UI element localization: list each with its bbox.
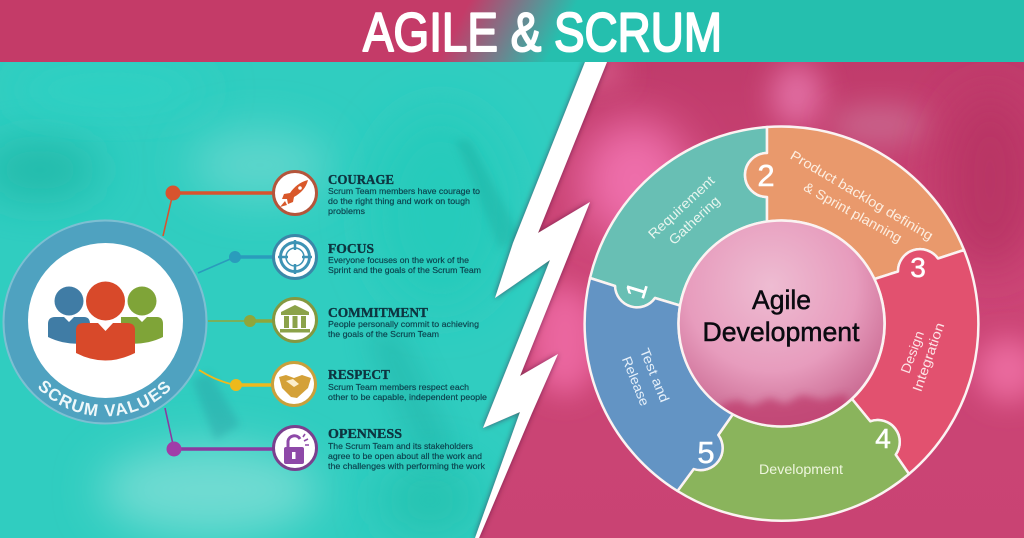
heading and description	[328, 242, 481, 275]
heading and description	[328, 368, 487, 402]
hub label: Agile	[752, 285, 811, 315]
heading and description	[328, 173, 480, 216]
heading and description: COMMITMENT	[328, 306, 429, 321]
step numbers: 1	[619, 278, 654, 302]
segment 1: requirement gathering	[590, 127, 767, 307]
value: openness	[274, 426, 486, 471]
segment labels: Product backlog defining	[788, 148, 936, 243]
segment 4: development	[678, 399, 909, 521]
icon: rocket	[274, 172, 316, 214]
heading and description: FOCUS	[328, 242, 374, 257]
icon: target	[274, 236, 316, 278]
heading and description: The Scrum Team and its stakeholders	[328, 441, 473, 451]
heading and description: the goals of the Scrum Team	[328, 329, 439, 339]
panel: agile development cycle	[585, 126, 978, 521]
step numbers	[619, 158, 926, 470]
step numbers: 3	[910, 252, 926, 283]
connector: respect	[199, 370, 275, 391]
step numbers: 2	[757, 158, 775, 193]
badge: scrum values	[2, 220, 208, 424]
heading and description: People personally commit to achieving	[328, 319, 479, 329]
heading and description: Everyone focuses on the work of the	[328, 255, 469, 265]
connector: openness	[165, 408, 275, 456]
heading and description: agree to be open about all the work and	[328, 451, 482, 461]
segment labels: Requirement	[645, 173, 718, 242]
step numbers: 4	[875, 423, 891, 454]
hub label	[702, 285, 860, 347]
heading and description	[328, 427, 486, 471]
heading and description: Scrum Team members respect each	[328, 382, 469, 392]
step numbers: 5	[697, 435, 715, 470]
right pink background	[470, 56, 1024, 538]
segment labels: Gathering	[666, 193, 723, 248]
icon: handshake	[272, 362, 316, 406]
lightning bolt divider	[475, 62, 607, 538]
header band	[0, 0, 1024, 62]
segment labels: Test and	[637, 346, 672, 404]
heading and description: the challenges with performing the work	[328, 461, 486, 471]
segment 5: test and release	[585, 278, 733, 491]
value: courage	[274, 172, 480, 216]
value: commitment	[274, 298, 479, 342]
heading and description	[328, 306, 479, 339]
connector: focus	[198, 251, 275, 273]
panel: scrum values connectors	[163, 186, 275, 456]
heading and description: other to be capable, independent people	[328, 392, 487, 402]
segment labels: Design	[898, 329, 927, 375]
left teal background	[0, 62, 600, 538]
segment 3: design integration	[852, 249, 978, 474]
segment 2: product backlog	[745, 126, 964, 279]
hub label: Development	[702, 317, 860, 347]
title: AGILE & SCRUM	[363, 1, 722, 63]
connector: commitment	[208, 315, 275, 327]
segment labels	[619, 148, 947, 477]
segment labels: Development	[759, 462, 843, 477]
value: focus	[274, 236, 481, 278]
heading and description: Scrum Team members have courage to	[328, 186, 480, 196]
badge label: SCRUM VALUES	[38, 380, 170, 416]
heading and description: COURAGE	[328, 173, 394, 188]
segment labels: & Sprint planning	[801, 179, 904, 246]
value: respect	[272, 362, 487, 406]
segment labels: Integration	[910, 321, 947, 394]
icon: temple	[274, 298, 316, 342]
connector: courage	[163, 186, 275, 236]
heading and description: RESPECT	[328, 368, 391, 383]
centre hub	[678, 220, 884, 432]
icon: team of three people	[48, 282, 163, 360]
icon: open padlock	[274, 426, 316, 470]
heading and description: do the right thing and work on tough	[328, 196, 470, 206]
heading and description: OPENNESS	[328, 427, 402, 442]
segment labels: Release	[619, 354, 652, 408]
heading and description: problems	[328, 206, 365, 216]
heading and description: Sprint and the goals of the Scrum Team	[328, 265, 481, 275]
